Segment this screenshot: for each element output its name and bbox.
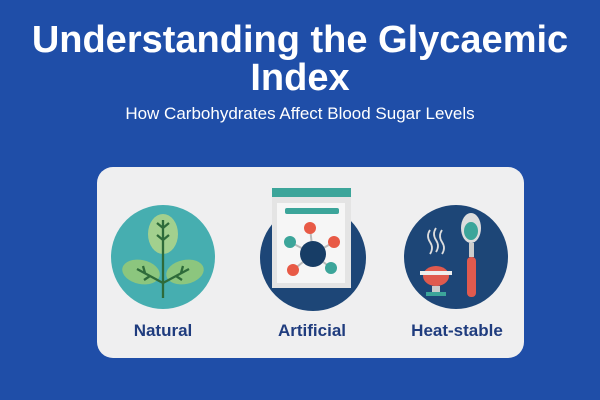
label: heat-stable: Heat-stable xyxy=(411,321,503,340)
icon: leaf (natural) xyxy=(111,205,215,309)
panel: sweetener types xyxy=(97,167,524,358)
title: Understanding the Glycaemic xyxy=(32,19,568,61)
icon: molecule bag (artificial) xyxy=(260,188,366,311)
title xyxy=(32,19,568,99)
label: artificial: Artificial xyxy=(278,321,346,340)
icon: spoon and heat (heat-stable) xyxy=(404,205,508,309)
label: natural: Natural xyxy=(134,321,192,340)
title: Index xyxy=(250,57,350,99)
subtitle: How Carbohydrates Affect Blood Sugar Levels xyxy=(125,104,475,123)
